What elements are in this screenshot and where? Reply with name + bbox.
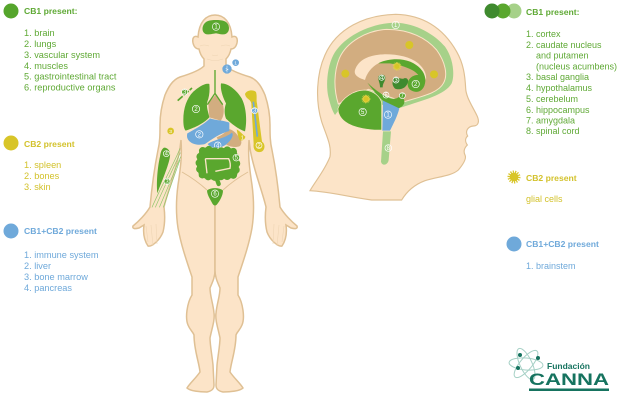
logo: Fundación CANNA: CANNA [529,370,609,389]
legend: brain CB2 present: CB2 present [526,173,577,183]
head cross-section [310,14,478,200]
vascular: upper arm [178,88,192,101]
legend: body CB2 present [4,136,75,192]
legend: body CB1+CB2 present [4,224,99,293]
legend: body CB1 present [4,4,117,92]
organ: intestines [199,150,240,184]
arm bone and marrow [245,90,264,152]
basal ganglia: 3 [394,78,398,84]
legend: brain CB1 present: 4. hypothalamus [526,83,593,93]
legend: brain CB1 present: 8. spinal cord [526,126,580,136]
organ: stomach [217,129,241,147]
legend: brain CB1 present: 1. cortex [526,29,561,39]
hypothalamus [378,75,385,87]
legend: brain CB1 present: (nucleus acumbens) [536,62,617,72]
legend: brain CB1 present: 3. basal ganglia [526,72,589,82]
skin marker [167,128,174,135]
cortex [327,21,453,115]
legend: brain CB2 present [510,172,577,204]
hypothalamus: 4 [380,76,384,82]
muscle and vessels: forearm: 3 [165,179,169,185]
brain tissue [335,29,446,104]
legend: body CB2 present: 1. spleen [24,160,61,170]
legend: brain CB1 present: and putamen [536,50,589,60]
legend: body CB1+CB2 present: 2. liver [24,261,51,271]
basal ganglia [393,77,408,89]
head silhouette [310,14,478,200]
spinal cord: 8 [387,146,391,152]
legend: body CB1 present: 6. reproductive organs [24,82,116,92]
hippocampus and amygdala [367,83,405,108]
organ: lungs: 2 [194,107,198,113]
organ: heart [208,95,224,121]
logo: Fundación CANNA: Fundación [547,361,590,371]
organ: pancreas: 4 [216,143,220,149]
cortex: 1 [394,23,398,29]
hippocampus and amygdala: 6 [384,93,388,99]
muscle and vessels: forearm: 4 [165,152,169,158]
legend: body CB2 present: 2. bones [24,171,60,181]
organ: liver [187,118,229,145]
legend: body CB1 present: 2. lungs [24,39,57,49]
legend: brain CB1 present: 6. hippocampus [526,105,590,115]
organ: brain: 1 [214,25,218,31]
legend: brain CB1 present: 2. caudate nucleus [526,40,602,50]
legend: body CB1 present: 1. brain [24,28,55,38]
organ: spleen: 1 [241,136,244,142]
corpus callosum gap [355,54,426,80]
organ: lungs [183,83,246,131]
legend: body CB1+CB2 present: CB1+CB2 present [24,226,97,236]
caudate nucleus and putamen: 2 [414,82,418,88]
caudate nucleus and putamen [378,59,425,92]
organ: trachea [207,70,223,105]
legend: brain CB2 present: glial cells [526,194,563,204]
vascular: upper arm: 3 [183,90,187,96]
cerebellum [338,90,382,130]
organ: liver: 2 [198,132,202,138]
brainstem [382,101,399,131]
organ: pancreas [208,133,233,149]
legend: brain CB1+CB2 present [506,236,599,271]
arm bone and marrow: 3 [253,109,257,115]
body figure [133,15,297,392]
legend: brain CB1 present: 7. amygdala [526,116,575,126]
cerebellum: 5 [361,110,365,116]
immune system markers: 1 [234,61,237,67]
legend: brain CB1+CB2 present: CB1+CB2 present [526,239,599,249]
legend: body CB1+CB2 present: 4. pancreas [24,283,72,293]
logo: Fundación CANNA [509,346,609,391]
organ: spleen [237,129,245,142]
organ: brain [203,20,229,34]
legend: brain CB1 present [484,4,617,136]
immune system markers [222,59,239,74]
legend: body CB1 present: 4. muscles [24,61,68,71]
legend: body CB2 present: CB2 present [24,139,75,149]
skin marker: 3 [169,129,172,135]
organ: reproductive [207,188,223,205]
legend: body CB1 present: 5. gastrointestinal tract [24,72,117,82]
legend: brain CB1+CB2 present: 1. brainstem [526,261,576,271]
legend: body CB1 present: CB1 present: [24,6,78,16]
legend: brain CB1 present: CB1 present: [526,7,580,17]
hippocampus and amygdala: 7 [401,94,405,100]
legend: body CB1+CB2 present: 3. bone marrow [24,272,88,282]
legend: body CB1+CB2 present: 1. immune system [24,250,99,260]
glial cell markers [341,41,438,102]
legend: body CB2 present: 3. skin [24,182,51,192]
arm bone and marrow: 2 [257,143,261,149]
legend: body CB1 present: 3. vascular system [24,50,100,60]
legend: brain CB1 present: 5. cerebelum [526,94,578,104]
spinal cord [381,131,392,165]
organ: reproductive: 6 [213,192,217,198]
organ: intestines: 5 [235,156,239,162]
muscle and vessels: forearm [152,148,181,207]
brainstem: 1 [386,113,390,119]
